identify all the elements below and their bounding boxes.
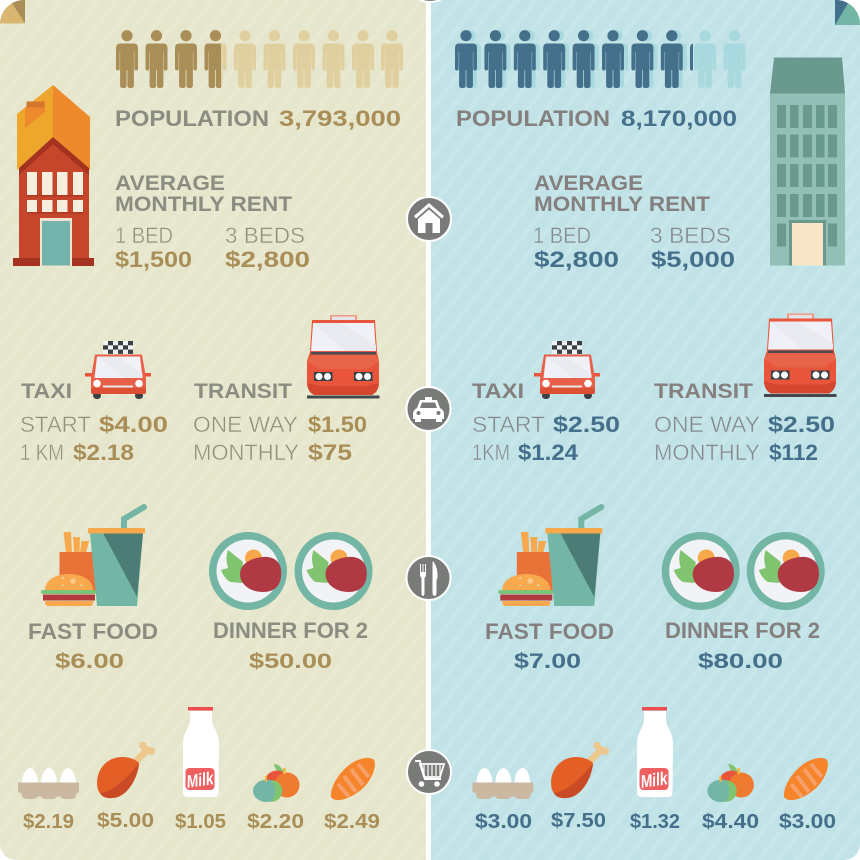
text: left population and rent: 1 BED	[115, 223, 173, 248]
text: left food prices: $6.00	[55, 650, 124, 673]
text: right food prices: DINNER FOR 2	[665, 618, 820, 643]
text: right taxi and transit: $1.24	[518, 440, 579, 465]
text: left taxi and transit: $1.50	[308, 412, 367, 437]
text: right taxi and transit: $2.50	[768, 412, 835, 437]
prices: $2.49	[324, 811, 380, 833]
text: right taxi and transit: START	[472, 412, 545, 437]
prices: $1.32	[630, 811, 680, 833]
text: left taxi and transit: $2.18	[73, 440, 134, 465]
icon: milk bottle: Milk	[185, 768, 216, 792]
prices: $5.00	[97, 810, 154, 832]
text: right taxi and transit: $112	[769, 440, 818, 465]
groceries: left	[18, 707, 380, 833]
prices: $4.40	[702, 811, 759, 833]
icon: eggs	[18, 768, 79, 799]
people row: right population	[455, 30, 746, 88]
corner fold: left	[0, 0, 25, 24]
prices	[23, 810, 380, 833]
icon: left fast food	[41, 507, 145, 606]
prices: $3.00	[475, 811, 532, 833]
icon: bread	[784, 758, 828, 800]
text: right taxi and transit: ONE WAY	[654, 412, 760, 437]
text: right population and rent: 3 BEDS	[650, 223, 731, 248]
text: right population and rent: POPULATION	[456, 106, 610, 131]
corner fold: right	[835, 0, 860, 25]
text: left taxi and transit	[20, 380, 367, 465]
icon: left taxi	[85, 341, 151, 399]
icon: chicken leg	[97, 742, 155, 798]
text: left taxi and transit: TAXI	[21, 380, 72, 403]
text: left taxi and transit: MONTHLY	[193, 440, 299, 465]
text: left population and rent: $1,500	[115, 247, 192, 272]
icon: milk bottle: Milk	[639, 768, 670, 792]
text: left taxi and transit: $75	[308, 440, 352, 465]
panel: right city	[431, 0, 860, 860]
text: left food prices	[28, 618, 368, 673]
groceries: right	[472, 707, 836, 833]
text: right population and rent	[456, 106, 737, 272]
text: left population and rent: AVERAGE	[115, 172, 225, 195]
icon: left transit	[307, 315, 380, 398]
text: right taxi and transit	[472, 380, 835, 465]
text: right population and rent: $2,800	[534, 247, 619, 272]
text: right population and rent: 8,170,000	[621, 106, 737, 131]
panel: left city	[0, 0, 426, 860]
icon: milk bottle	[637, 707, 673, 797]
icon: eggs	[472, 768, 533, 799]
center badge: top	[407, 0, 453, 2]
text: left taxi and transit: START	[20, 412, 91, 437]
text: left population and rent: MONTHLY RENT	[115, 193, 292, 216]
icon: apples	[253, 764, 300, 802]
prices: $1.05	[175, 811, 226, 833]
prices: $2.20	[247, 811, 304, 833]
text: right population and rent: MONTHLY RENT	[534, 193, 710, 216]
text: left population and rent	[115, 106, 401, 272]
center badge: shopping cart	[407, 750, 451, 794]
icon: right fast food	[498, 507, 602, 606]
icon: chicken leg	[551, 742, 609, 798]
text: right food prices	[485, 618, 820, 673]
text: left food prices: $50.00	[249, 650, 332, 673]
text: left taxi and transit: $4.00	[99, 412, 168, 437]
text: right taxi and transit: TAXI	[472, 380, 524, 403]
prices: $3.00	[779, 811, 836, 833]
prices: $7.50	[551, 810, 606, 832]
icon: left dinner plates	[209, 532, 372, 610]
center badge: house	[407, 197, 451, 241]
text: left population and rent: 3 BEDS	[225, 223, 305, 248]
icon: red house	[13, 85, 94, 266]
text: right population and rent: AVERAGE	[534, 172, 643, 195]
text: left food prices: DINNER FOR 2	[213, 618, 368, 643]
text: right taxi and transit: $2.50	[553, 412, 620, 437]
people row: left population	[116, 30, 403, 88]
text: right population and rent: $5,000	[651, 247, 735, 272]
text: left taxi and transit: 1 KM	[20, 440, 64, 465]
center badge: taxi	[406, 387, 450, 431]
text: left population and rent: $2,800	[225, 247, 310, 272]
icon: teal tower	[770, 58, 845, 266]
text: right population and rent: 1 BED	[533, 223, 591, 248]
text: right taxi and transit: TRANSIT	[654, 380, 753, 403]
icon: bread	[331, 758, 375, 800]
text: left population and rent: 3,793,000	[279, 106, 401, 131]
text: right food prices: $7.00	[514, 650, 581, 673]
text: right taxi and transit: MONTHLY	[654, 440, 760, 465]
icon: milk bottle	[183, 707, 219, 797]
text: right food prices: $80.00	[698, 650, 783, 673]
icon: right transit	[764, 314, 836, 397]
text: left population and rent: POPULATION	[115, 106, 269, 131]
icon: right dinner plates	[662, 532, 825, 610]
text: left taxi and transit: ONE WAY	[193, 412, 298, 437]
center badge: fork and knife	[406, 556, 450, 600]
prices: $2.19	[23, 811, 74, 833]
icon: apples	[707, 764, 754, 802]
text: right taxi and transit: 1KM	[472, 440, 510, 465]
prices	[475, 810, 836, 833]
text: left food prices: FAST FOOD	[28, 619, 158, 644]
icon: right taxi	[534, 341, 600, 399]
text: right food prices: FAST FOOD	[485, 619, 614, 644]
text: left taxi and transit: TRANSIT	[194, 380, 292, 403]
